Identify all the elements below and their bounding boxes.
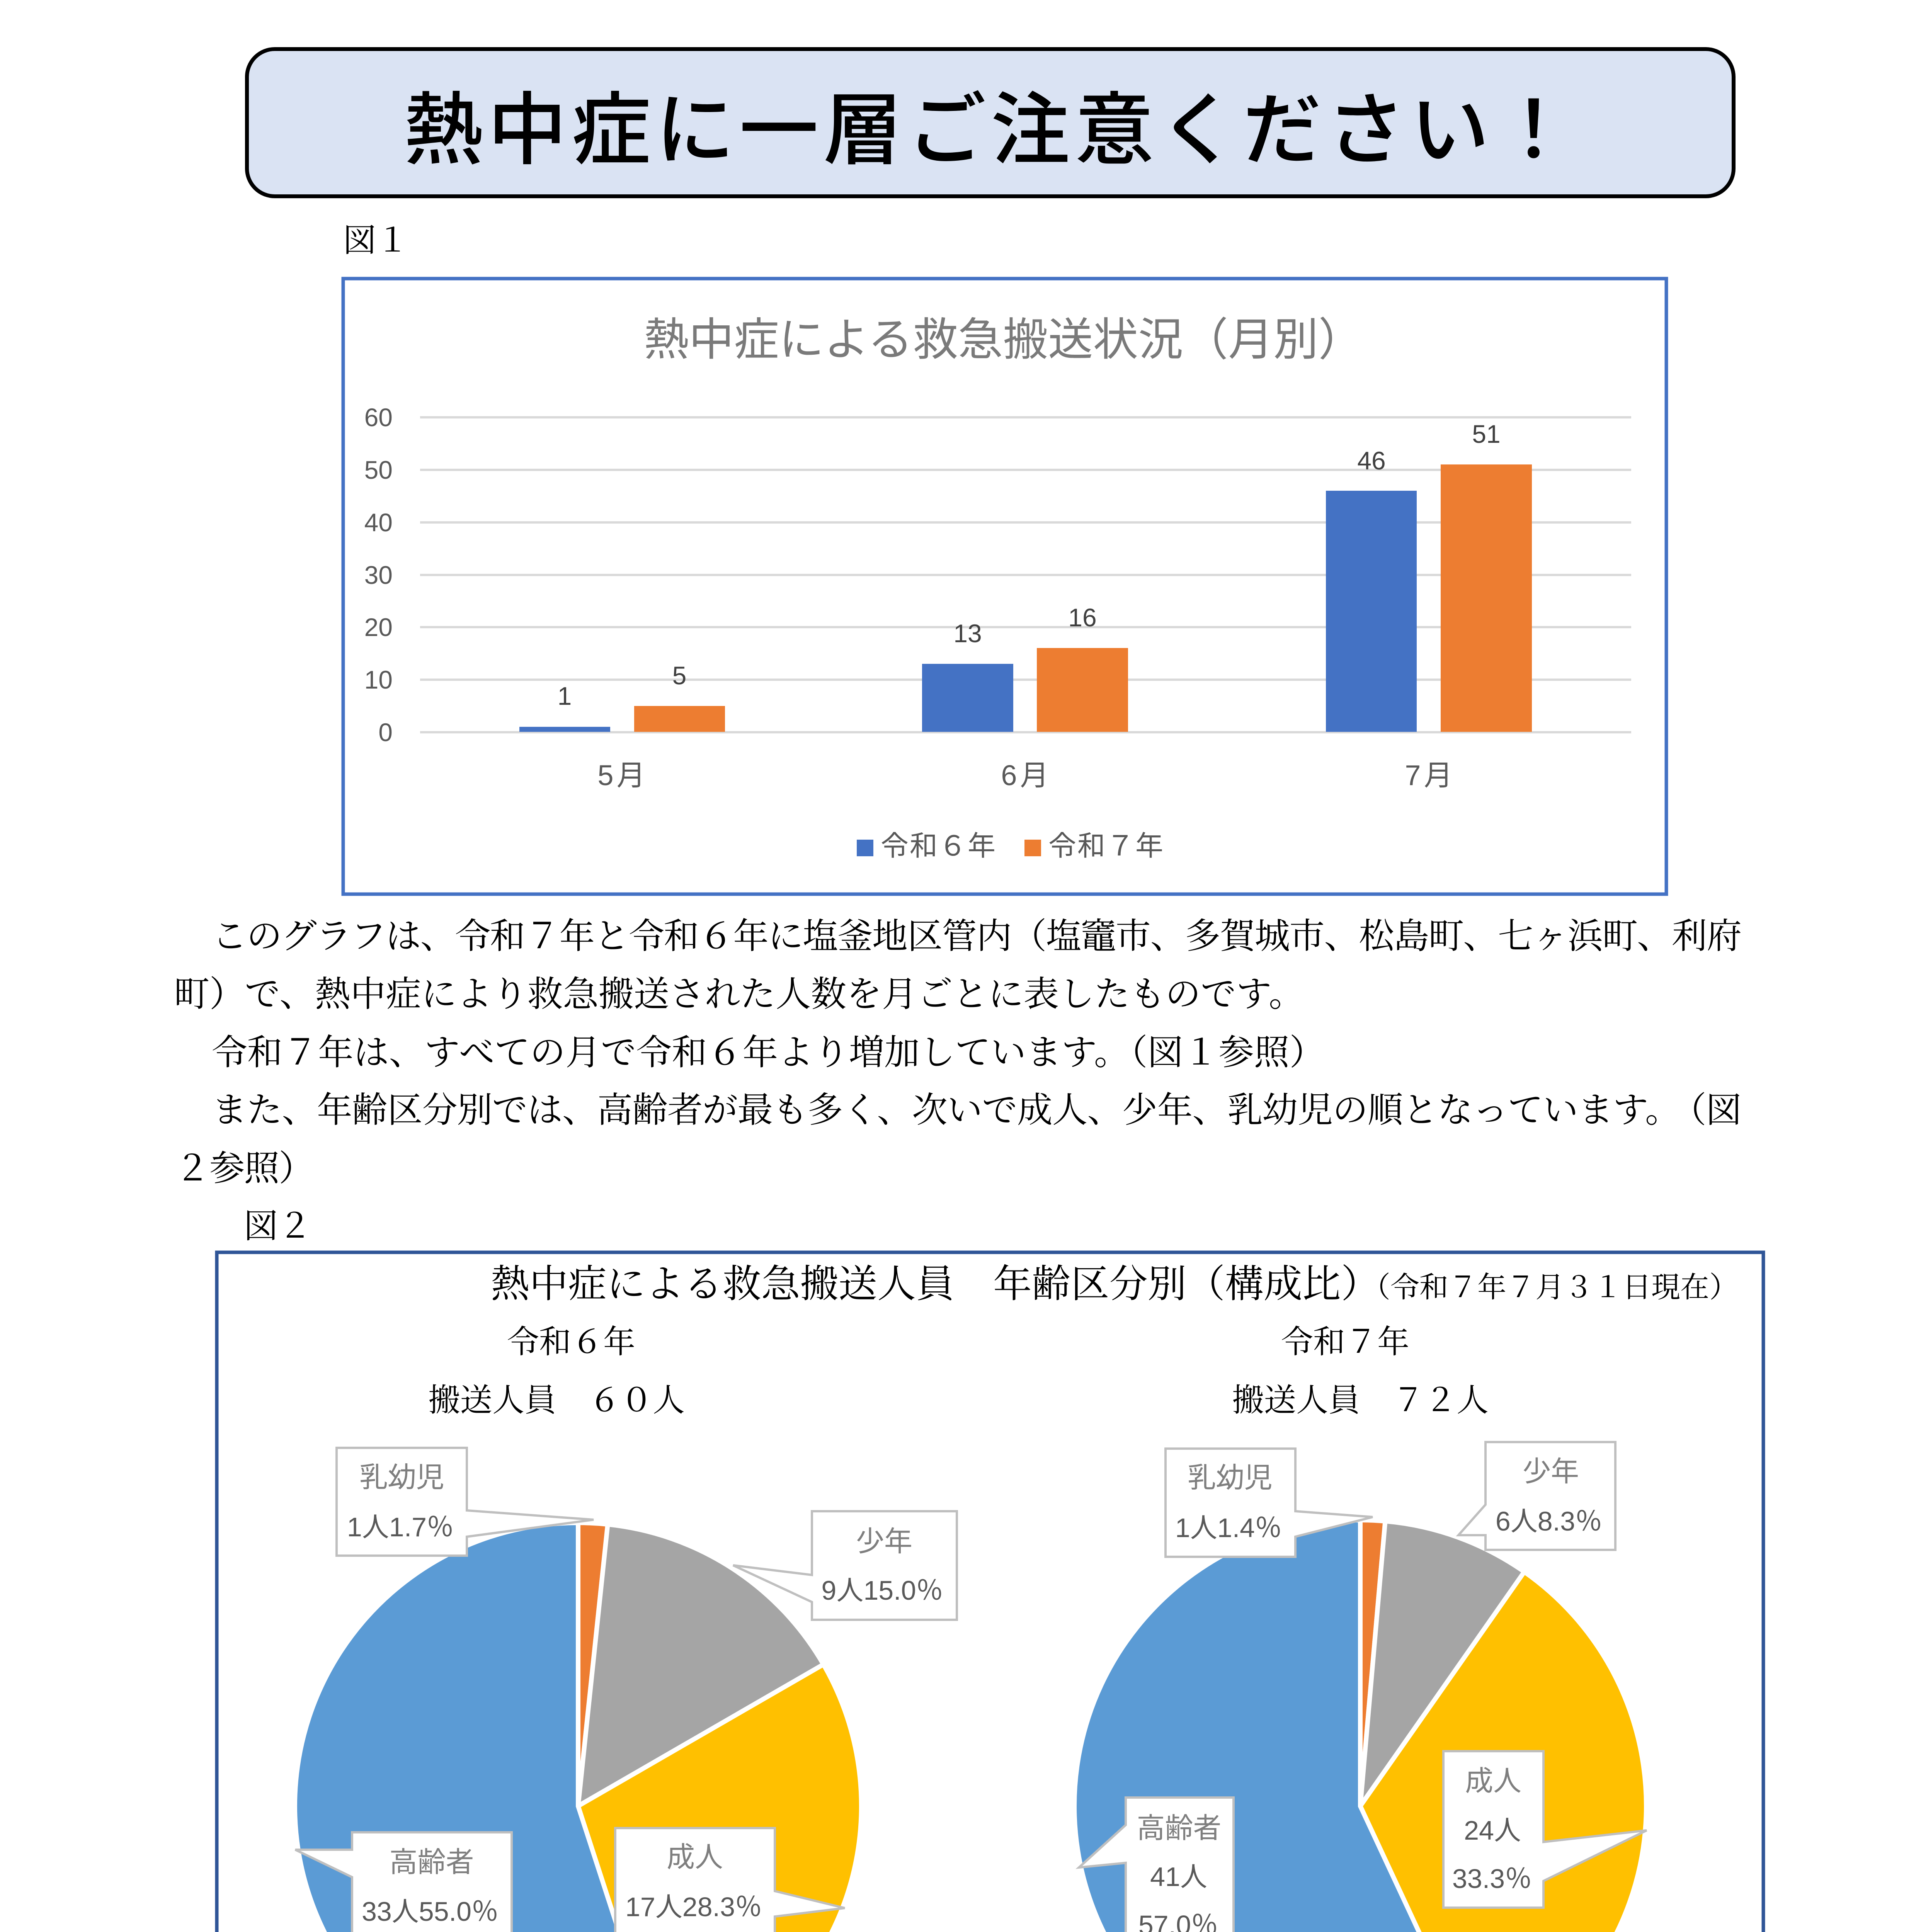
Reiwa 6 total: 搬送人員 ６０人: [428, 1383, 685, 1418]
callout: adults: 17人28.3％: [625, 1892, 762, 1922]
title text: 熱中症に一層ご注意ください！: [404, 86, 1578, 175]
panel: figure 2 pie charts: [217, 1252, 1763, 1932]
explanatory text: 町）で、熱中症により救急搬送された人数を月ごとに表したものです。: [174, 975, 1304, 1014]
category labels: 5月: [597, 759, 648, 791]
data labels: 1: [558, 682, 572, 710]
data labels: [558, 420, 1501, 710]
callout: infants: [337, 1448, 594, 1556]
pie chart Reiwa 7: [1074, 1520, 1646, 1932]
explanatory text: このグラフは、令和７年と令和６年に塩釜地区管内（塩竈市、多賀城市、松島町、七ヶ浜町、利府: [212, 917, 1741, 956]
Reiwa 7 total: 搬送人員 ７２人: [1232, 1383, 1489, 1418]
data labels: 16: [1068, 603, 1097, 632]
category labels: 6月: [1001, 759, 1052, 791]
callout: youth: [1458, 1442, 1615, 1550]
legend: 令和６年: [881, 831, 995, 862]
callout: youth: 6人8.3％: [1496, 1506, 1602, 1536]
explanatory text: （図１参照）: [1112, 1033, 1325, 1072]
data labels: 46: [1357, 446, 1386, 475]
y axis labels: 20: [364, 613, 393, 641]
callout: youth: 少年: [856, 1526, 912, 1557]
callout: elderly: 高齢者: [390, 1847, 474, 1878]
y axis labels: [364, 403, 393, 747]
callout: adults: [1443, 1751, 1647, 1908]
title banner: [247, 49, 1734, 196]
chart title: 熱中症による救急搬送状況（月別）: [644, 314, 1363, 365]
Reiwa 7 heading: 令和７年: [1281, 1324, 1409, 1360]
callout: adults: [615, 1828, 845, 1932]
callout: elderly: 41人: [1150, 1862, 1207, 1892]
data labels: 5: [672, 661, 686, 690]
y axis labels: 10: [364, 665, 393, 694]
y axis labels: 30: [364, 561, 393, 589]
explanatory text: 令和７年は、すべての月で令和６年より増加しています。: [212, 1033, 1130, 1072]
callout: infants: 1人1.4％: [1175, 1513, 1282, 1543]
figure 2 label: 図２: [244, 1208, 312, 1245]
data labels: 51: [1472, 420, 1501, 448]
panel heading: 熱中症による救急搬送人員 年齢区分別（構成比）: [491, 1263, 1380, 1306]
callout: infants: 1人1.7％: [347, 1512, 454, 1542]
pie chart Reiwa 6: [295, 1523, 861, 1932]
category labels: [597, 759, 1456, 791]
bars: Reiwa 7: [634, 464, 1532, 732]
category labels: 7月: [1405, 759, 1456, 791]
callout: youth: [733, 1511, 957, 1620]
callout: adults: 24人: [1464, 1815, 1521, 1845]
callout: adults: 成人: [667, 1842, 723, 1873]
y axis labels: 40: [364, 508, 393, 537]
callout: elderly: 33人55.0％: [362, 1896, 499, 1927]
data labels: 13: [953, 619, 982, 648]
explanatory text: また、年齢区分別では、高齢者が最も多く、次いで成人、少年、乳幼児の順となっています。: [212, 1090, 1680, 1130]
callout: elderly: [295, 1832, 512, 1932]
explanatory text: （図: [1671, 1090, 1741, 1130]
y axis labels: 50: [364, 456, 393, 484]
heading date note: （令和７年７月３１日現在）: [1361, 1272, 1738, 1304]
y axis labels: 0: [378, 718, 393, 747]
callout: infants: [1166, 1449, 1373, 1557]
Reiwa 6 pie group: [295, 1324, 957, 1932]
figure 1 label: 図１: [343, 223, 409, 259]
panel: figure 1 bar chart: [343, 279, 1666, 894]
Reiwa 7 pie group: [1074, 1324, 1647, 1932]
callout: adults: 33.3％: [1452, 1864, 1532, 1894]
explanatory text: [174, 917, 1741, 1188]
legend: [857, 831, 1163, 862]
bars: Reiwa 6: [519, 491, 1417, 732]
callout: elderly: 高齢者: [1137, 1813, 1221, 1844]
callout: youth: 9人15.0％: [821, 1575, 943, 1605]
callout: adults: 成人: [1465, 1765, 1521, 1797]
legend: 令和７年: [1048, 831, 1163, 862]
callout: elderly: [1079, 1798, 1234, 1932]
callout: infants: 乳幼児: [1188, 1462, 1272, 1493]
Reiwa 6 heading: 令和６年: [507, 1324, 635, 1360]
callout: infants: 乳幼児: [359, 1462, 444, 1493]
callout: youth: 少年: [1523, 1456, 1579, 1487]
explanatory text: ２参照）: [175, 1149, 313, 1188]
y axis labels: 60: [364, 403, 393, 432]
